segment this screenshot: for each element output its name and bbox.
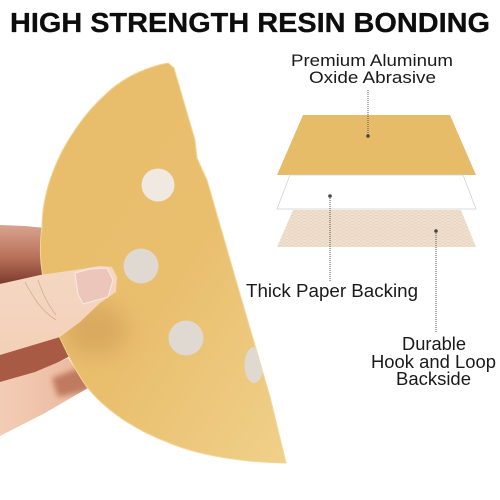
hand holding the disc (0, 225, 90, 436)
layer: hook and loop backside (277, 210, 476, 247)
layer: aluminum oxide abrasive (277, 115, 476, 175)
hole 3 (168, 320, 204, 356)
lower finger (0, 358, 90, 436)
label: durable hook and loop backside: Durable (402, 334, 466, 354)
hole 4, partly hidden at the disc edge (244, 347, 264, 383)
label: premium aluminum oxide abrasive (291, 51, 453, 87)
label: durable hook and loop backside: Hook and Loop (371, 352, 496, 372)
thumbnail (75, 268, 113, 304)
title: HIGH STRENGTH RESIN BONDING (10, 7, 490, 38)
leader line: hook and loop (434, 229, 438, 332)
knuckle wrinkles (25, 280, 56, 320)
middle finger in shadow (0, 336, 70, 384)
label: thick paper backing: Thick Paper Backing (246, 281, 418, 301)
hole 1 (142, 168, 174, 202)
hole 2 (124, 248, 158, 284)
layer: paper backing (277, 175, 476, 209)
label: durable hook and loop backside (371, 334, 496, 389)
back finger (0, 225, 45, 284)
leader line: abrasive (366, 90, 370, 138)
sanding disc (40, 63, 286, 463)
label: durable hook and loop backside: Backside (396, 369, 471, 389)
label: premium aluminum oxide abrasive: Premium Aluminum (291, 51, 453, 70)
label: premium aluminum oxide abrasive: Oxide Abrasive (309, 68, 436, 87)
thumb (0, 266, 117, 355)
leader line: paper backing (328, 194, 332, 282)
thumb shadow on disc (63, 304, 127, 356)
